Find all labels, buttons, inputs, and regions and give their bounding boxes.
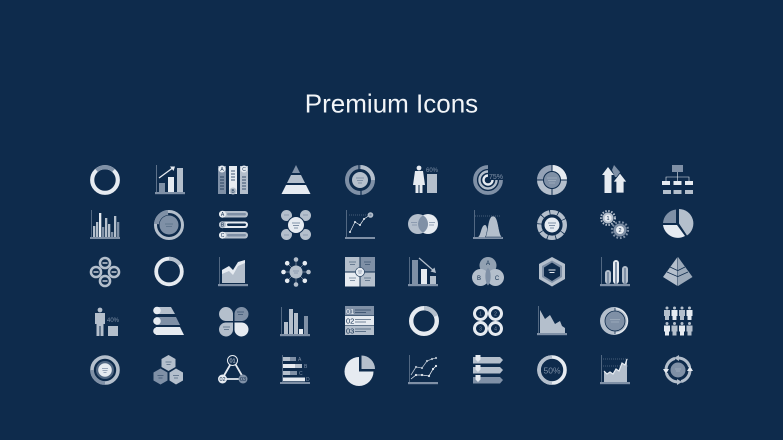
icon: A B C option list: A: [221, 212, 225, 218]
icon: donut ring: [92, 167, 118, 193]
icon: man with 40% bar: 40%: [107, 318, 120, 324]
icon: segmented ring with centre disc: [347, 165, 373, 195]
icon: three book columns: [218, 166, 248, 195]
icon: hub with four satellites: [281, 210, 311, 240]
icon: radial dots: [281, 257, 311, 287]
icon: dense bar chart: [90, 210, 120, 239]
icon: ring with offset segment: [156, 212, 182, 238]
icon: four numbered linked rings: 3: [479, 326, 482, 332]
icon: four numbered linked rings: 2: [494, 312, 497, 318]
icon: numbered list 01 02 03: 02: [346, 316, 354, 326]
icon: four linked ovals: [90, 257, 120, 287]
icon: radial 75% chart: [475, 167, 503, 193]
icon: descending area chart: [537, 306, 567, 335]
icon grid: [90, 165, 693, 386]
icon: falling bar chart: [408, 257, 438, 286]
icon: 3D pyramid: [663, 257, 692, 286]
icon: horizontal bars A B C D: A: [298, 357, 302, 363]
icon: four numbered linked rings: 4: [494, 326, 497, 332]
icon: circular arrows around disc: [663, 355, 693, 385]
icon: three hexagons: [154, 355, 183, 384]
icon: triangle network 01 02 03: 01: [229, 358, 236, 364]
icon: mountain area chart: [600, 355, 630, 384]
icon: double line chart: [408, 355, 438, 384]
icon: 50% progress ring: [539, 357, 565, 383]
icon: three-circle A B C venn: [472, 257, 504, 286]
icon: horizontal bars A B C D: [280, 355, 310, 384]
icon: numbered list 01 02 03: [345, 306, 374, 336]
icon: numbered list 01 02 03: 03: [346, 326, 354, 336]
icon: bell curve area chart: [473, 210, 503, 239]
icon: horizontal bars A B C D: D: [306, 377, 310, 383]
icon: three-circle A B C venn: C: [495, 276, 500, 282]
icon: hexagon badge: [539, 257, 565, 286]
icon: three book columns: A: [220, 167, 224, 173]
icon: stacked funnel rows: [153, 307, 184, 335]
icon: crowd of people grid: [664, 306, 692, 336]
icon: four numbered linked rings: 1: [479, 312, 482, 318]
icon: concentric ring with centre disc: [92, 357, 118, 383]
icon: pie chart three slices: [663, 209, 693, 238]
icon: man with 40% bar: [95, 308, 120, 336]
icon: stacked tabs list: [473, 355, 503, 384]
icon: disc with split outer ring: [600, 307, 628, 335]
icon: numbered gears: 2: [618, 228, 622, 234]
icon: three up arrows: [602, 165, 627, 193]
title: Premium Icons: [305, 88, 478, 118]
icon: A B C option list: B: [221, 222, 225, 228]
icon: venn diagram: [408, 214, 438, 234]
icon: pie chart with exploded slice: [344, 356, 375, 386]
icon: four-piece puzzle: [345, 257, 375, 286]
icon: donut ring thin segment: [156, 259, 182, 284]
icon: 50% progress ring: 50%: [543, 366, 561, 376]
icon: growth bar chart: [155, 165, 185, 194]
icon: line chart with target point: [345, 210, 375, 239]
icon: layered area chart: [218, 257, 248, 286]
icon: radial 75% chart: 75%: [489, 174, 503, 181]
icon: organisation chart: [662, 165, 693, 194]
icon: three book columns: C: [242, 167, 246, 173]
icon: A B C option list: [219, 211, 248, 239]
icon: numbered gears: 1: [606, 216, 610, 222]
icon: triangle network 01 02 03: 02: [219, 377, 226, 383]
icon: histogram: [280, 307, 310, 336]
icon: four numbered linked rings: [474, 308, 502, 334]
icon: segmented donut with core: [537, 165, 567, 195]
icon: cylinder bar chart: [600, 257, 630, 286]
icon: three-circle A B C venn: B: [477, 276, 481, 282]
icon: donut ring bold: [411, 308, 437, 334]
icon: three-circle A B C venn: A: [486, 261, 490, 267]
icon: four-leaf clover: [219, 307, 248, 336]
icon: woman with 60% bar: 60%: [426, 168, 439, 174]
icon: woman with 60% bar: [413, 166, 439, 193]
icon: three book columns: B: [231, 189, 235, 195]
icon: numbered gears: [601, 211, 628, 238]
icon: layered pyramid: [282, 165, 310, 194]
icon: A B C option list: C: [221, 233, 225, 239]
icon: dashed ring with centre disc: [539, 212, 565, 238]
icon: numbered list 01 02 03: 01: [346, 307, 354, 316]
icon: horizontal bars A B C D: C: [299, 371, 303, 377]
icon: triangle network 01 02 03: [218, 356, 248, 384]
icon: horizontal bars A B C D: B: [304, 364, 308, 370]
icon: triangle network 01 02 03: 03: [240, 377, 246, 383]
